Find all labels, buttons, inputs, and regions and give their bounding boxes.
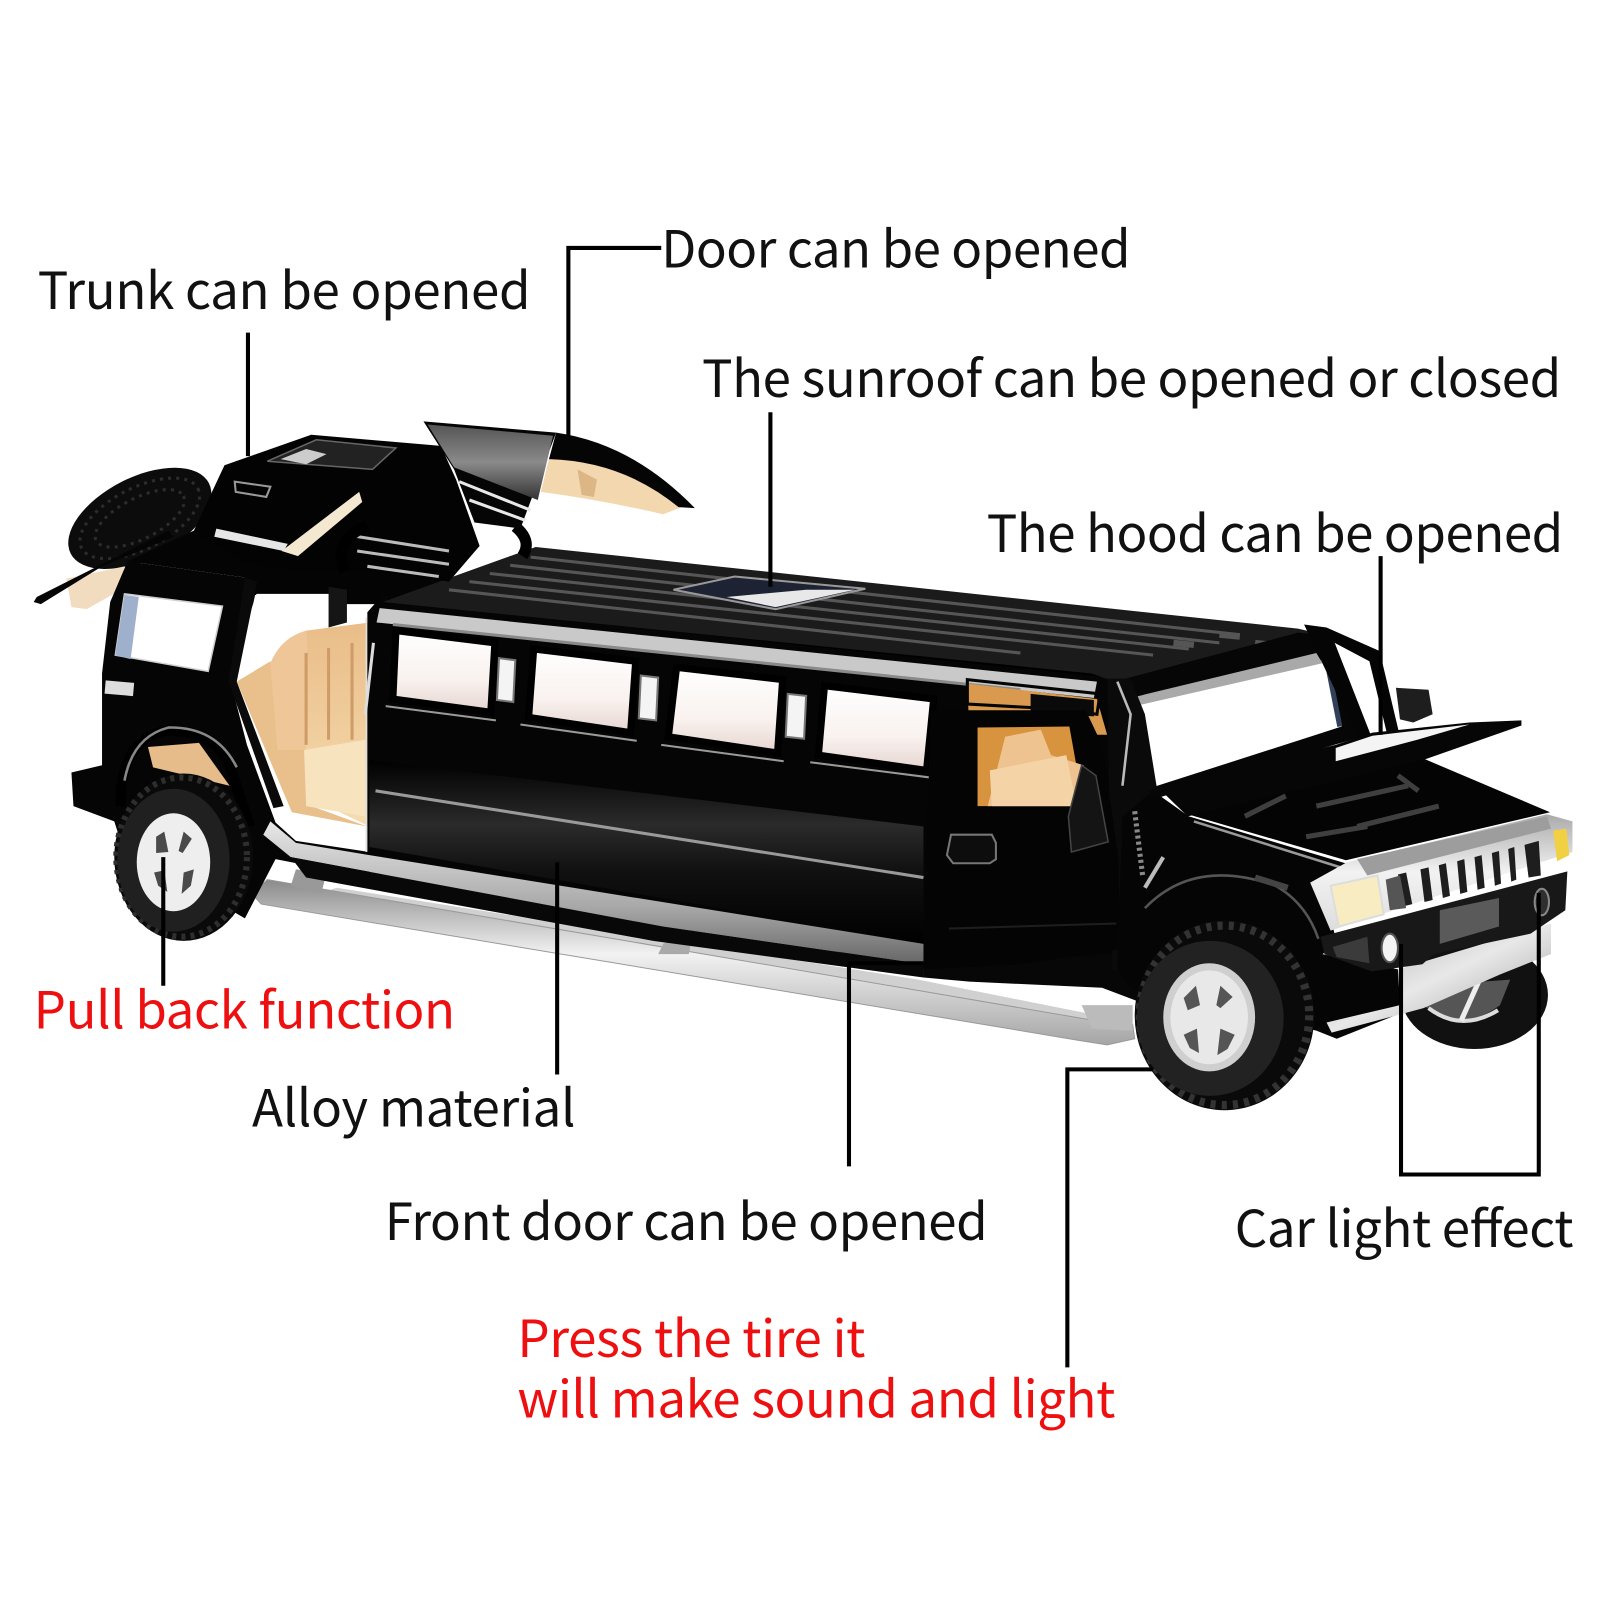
window 4 bbox=[818, 686, 934, 770]
grille slots bbox=[1398, 841, 1541, 906]
engine bay bbox=[1188, 758, 1550, 869]
rocker under door bbox=[923, 954, 1148, 1005]
leader: car light bbox=[1401, 893, 1539, 1174]
front headlight left bbox=[1331, 876, 1384, 927]
rear arch bbox=[120, 728, 250, 827]
label: hood: The hood can be opened bbox=[987, 493, 1563, 567]
front fender and chassis bbox=[1117, 791, 1408, 1039]
main long body bbox=[365, 595, 1135, 969]
fog light left bbox=[1382, 934, 1398, 962]
window trims bbox=[386, 706, 931, 778]
leader: tire bbox=[1067, 1069, 1153, 1367]
fog light right bbox=[1535, 889, 1549, 915]
roof bbox=[383, 547, 1324, 682]
sunroof bbox=[673, 577, 865, 609]
leader: pull back bbox=[161, 857, 165, 986]
window 3 bbox=[668, 667, 783, 753]
label: sunroof: The sunroof can be opened or closed bbox=[702, 338, 1561, 412]
limousine toy car bbox=[34, 421, 1572, 1110]
leader: door bbox=[568, 248, 661, 437]
leader lines bbox=[163, 248, 1539, 1367]
label: car light: Car light effect bbox=[1235, 1188, 1573, 1262]
rear gull-wing door bbox=[194, 435, 480, 582]
window 2 bbox=[529, 649, 636, 733]
rear roof bridge bbox=[128, 531, 480, 604]
side mirror bbox=[1396, 688, 1433, 722]
leader: trunk bbox=[246, 333, 250, 456]
label: alloy: Alloy material bbox=[252, 1068, 576, 1142]
passenger windows bbox=[386, 631, 934, 778]
rear door opening and seat bbox=[237, 587, 369, 832]
rear window bbox=[115, 594, 222, 671]
running board bbox=[252, 869, 1135, 1045]
open front door bbox=[923, 680, 1120, 969]
label: front door: Front door can be opened bbox=[385, 1181, 988, 1255]
bumper mesh bbox=[1440, 898, 1499, 944]
side sill bbox=[263, 821, 923, 964]
label: pull back: Pull back function bbox=[34, 970, 455, 1044]
label: press the tire: Press the tire it bbox=[517, 1298, 865, 1372]
label: door: Door can be opened bbox=[661, 208, 1131, 282]
leader: hood bbox=[1379, 556, 1383, 735]
label: sound and light: will make sound and light bbox=[517, 1358, 1115, 1432]
marker lights bbox=[497, 658, 806, 739]
open hood bbox=[1148, 720, 1521, 816]
rear tail light bbox=[105, 680, 134, 696]
grille bbox=[1310, 814, 1572, 931]
middle gull-wing door bbox=[423, 421, 695, 529]
label: trunk: Trunk can be opened bbox=[38, 250, 531, 324]
lower black rocker bbox=[291, 857, 923, 978]
windshield frame and pillars bbox=[1107, 624, 1400, 980]
far front wheel bbox=[1401, 941, 1548, 1049]
spare tire bbox=[52, 447, 227, 590]
front wheel bbox=[1135, 920, 1314, 1110]
leader: sunroof bbox=[768, 412, 772, 587]
rear wheel bbox=[114, 773, 253, 941]
front headlight right bbox=[1553, 829, 1569, 861]
skid plate bbox=[1327, 923, 1551, 1033]
leader: alloy bbox=[555, 862, 559, 1074]
roof hinge arm bbox=[341, 526, 526, 571]
rear pillar bbox=[229, 578, 284, 808]
leader: front door bbox=[849, 963, 923, 1166]
window 1 bbox=[393, 631, 495, 712]
rear body section bbox=[71, 561, 369, 918]
front bumper bbox=[1320, 871, 1567, 971]
open trunk flap bbox=[34, 531, 173, 609]
